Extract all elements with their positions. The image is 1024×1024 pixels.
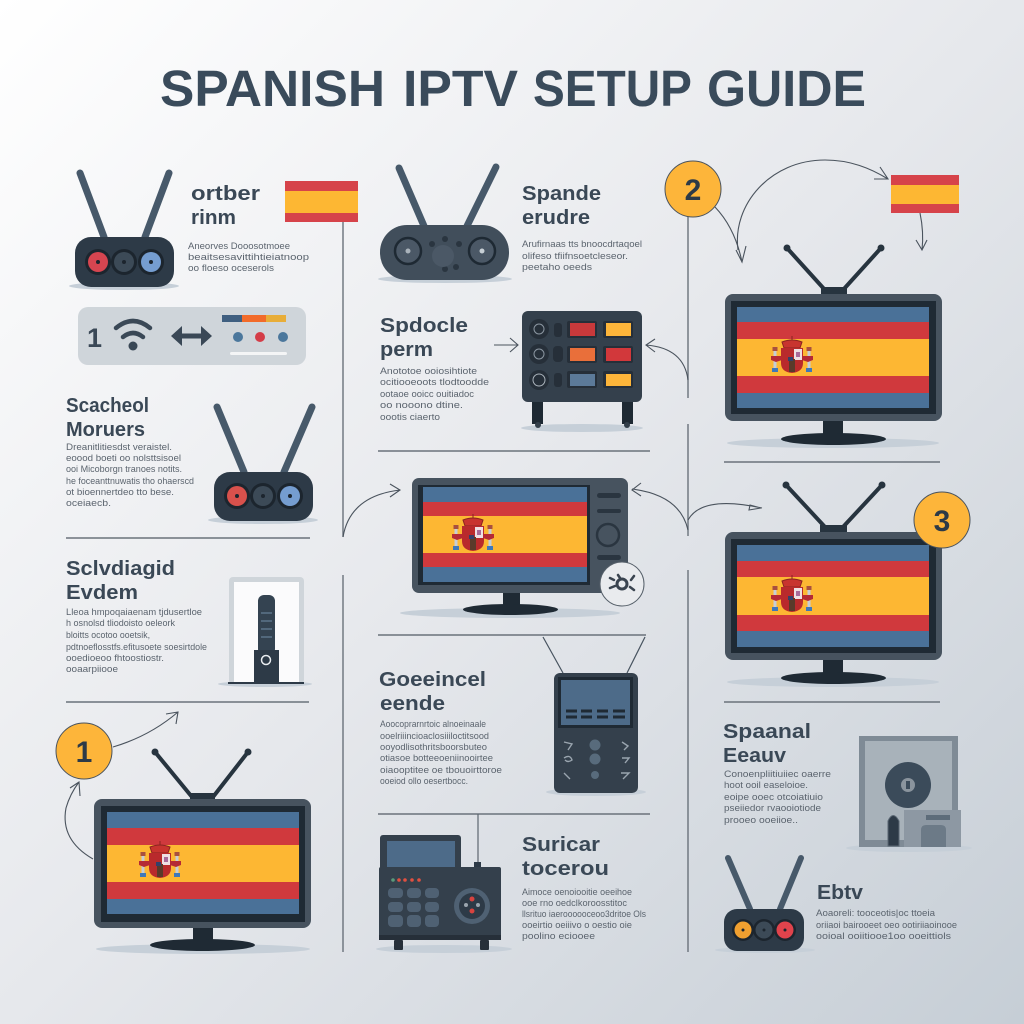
router icon 2 xyxy=(208,407,318,524)
text block: Scchool: ot bioennertdeo tto bese. xyxy=(66,487,174,498)
text block: Sclvdiagid xyxy=(66,607,207,675)
text block: Goeeincel: otiasoe botteeoeniinooirtee xyxy=(380,753,493,764)
heading: Sclvdiagid Evdem: Evdem xyxy=(66,581,138,604)
heading: ortber rinm xyxy=(191,182,260,229)
text block: Scchool: he foceanttnuwatis tho ohaerscd xyxy=(66,476,194,487)
number 1: 1 xyxy=(87,323,102,353)
badge: step 2: 2 xyxy=(685,174,701,207)
heading: Goeeincel eende: eende xyxy=(380,692,445,715)
text block: Spande: olifeso tfiifnsoetcleseor. xyxy=(522,251,628,262)
text block: Sclvdiagid: bloitts ocotoo ooetsik, xyxy=(66,630,150,641)
text block: Spaanal: eoipe ooec otcoiatiuio xyxy=(724,792,823,803)
title: SETUP xyxy=(533,60,692,117)
text block: router 1: Aneorves Dooosotmoee xyxy=(188,241,290,252)
heading: Suricar tocerou: Suricar xyxy=(522,833,600,856)
text block: Spande: peetaho oeeds xyxy=(522,262,592,273)
arrow: flag to TV xyxy=(916,213,927,250)
text block: Spdocle: oootis ciaerto xyxy=(380,412,440,423)
text block: router 1: beaitsesavittihtieiatnoop xyxy=(188,252,309,263)
heading: Scchool Morurs xyxy=(66,394,149,441)
router icon 1 xyxy=(69,173,179,290)
heading: ortber rinm: rinm xyxy=(191,206,236,229)
central TV with Spanish flag xyxy=(400,478,644,618)
radio device xyxy=(376,814,512,953)
TV with Spanish flag 3 xyxy=(725,482,942,687)
badge: step 1: 1 xyxy=(76,736,92,769)
text block: Sclvdiagid: pdtnoeflosstfs.efitusoete soesirtdole xyxy=(66,642,207,653)
streaming stick in window xyxy=(218,577,312,687)
connector lines xyxy=(66,217,940,952)
heading: Scchool Morurs: Moruers xyxy=(66,418,145,441)
text block: Suricar: poolino eciooee xyxy=(522,931,595,942)
text block: Spande xyxy=(522,239,642,273)
heading: Spande erudre xyxy=(522,182,601,229)
arrow: TV to step 1 xyxy=(65,782,93,859)
heading: Spdocle perm: Spdocle xyxy=(380,314,468,337)
title: GUIDE xyxy=(707,60,866,117)
text block: Suricar xyxy=(522,887,646,942)
control panel device xyxy=(521,311,643,432)
flag: Spain top left xyxy=(285,181,358,222)
text block: Spdocle xyxy=(380,366,489,423)
heading: Spdocle perm: perm xyxy=(380,338,433,361)
remote control device xyxy=(543,637,646,796)
text block: Ebtv: Aoaoreli: tooceotis|oc ttoeia xyxy=(816,908,936,919)
text block: Sclvdiagid: ooaarpiiooe xyxy=(66,664,118,675)
text block: router 1: oo floeso oceserols xyxy=(188,263,274,274)
badge: step 3: 3 xyxy=(934,505,950,538)
heading: Spaanal Eeauv: Eeauv xyxy=(723,744,787,767)
text block: Spdocle: oo nooono dtine. xyxy=(380,400,463,411)
heading: Spande erudre: erudre xyxy=(522,206,590,229)
text block: Goeeincel: ooeiod ollo oesertbocc. xyxy=(380,776,468,787)
text block: Scchool: Dreanitlitiesdst veraistel. xyxy=(66,442,172,453)
text block: Spaanal: pseiiedor rvaooiotiode xyxy=(724,803,821,814)
title xyxy=(160,60,866,117)
heading: Spdocle perm xyxy=(380,314,468,361)
router icon 3 xyxy=(378,167,512,283)
arrow: line to central TV right xyxy=(632,483,688,530)
badge: step 1 xyxy=(56,723,112,779)
text block: Spaanal xyxy=(724,769,831,826)
text block: Ebtv xyxy=(816,908,957,942)
building icon xyxy=(846,736,972,852)
text block: Spdocle: ootaoe ooicc ouitiadoc xyxy=(380,389,474,400)
TV with Spanish flag 2 xyxy=(725,244,942,448)
arrow: line to central TV left xyxy=(343,484,400,537)
title: SPANISH xyxy=(160,60,385,117)
heading: Spande erudre: Spande xyxy=(522,182,601,205)
heading: Goeeincel eende: Goeeincel xyxy=(379,668,486,691)
device xyxy=(222,315,288,355)
text block: Suricar: ooeirtio oeiiivo o oestio oie xyxy=(522,920,632,931)
heading: Spaanal Eeauv: Spaanal xyxy=(723,720,811,743)
heading: ortber rinm: ortber xyxy=(191,182,260,205)
heading: Spaanal Eeauv xyxy=(723,720,811,767)
router icon 4 xyxy=(715,858,815,953)
text block: Spdocle: Anototoe ooiosihtiote xyxy=(380,366,477,377)
arrow: into control panel xyxy=(494,338,518,352)
text block: Suricar: llsrituo iaeroooooceoo3dritoe Ols xyxy=(522,909,646,920)
icon: double arrow xyxy=(171,326,212,346)
heading: Goeeincel eende xyxy=(379,668,486,715)
heading: Sclvdiagid Evdem: Sclvdiagid xyxy=(66,557,175,580)
text block: Spaanal: hoot ooil easeloioe. xyxy=(724,780,808,791)
icon: settings badge xyxy=(600,562,644,606)
arrow: step 2 to TV xyxy=(715,207,746,262)
badge: step 2 xyxy=(665,161,721,217)
text block: Spdocle: ocitiooeoots tlodtoodde xyxy=(380,377,489,388)
text block: router 1 xyxy=(188,241,309,274)
TV with Spanish flag 1 xyxy=(94,748,311,954)
heading: Suricar tocerou xyxy=(522,833,609,880)
panel: wifi connection xyxy=(78,307,306,365)
text block: Spaanal: Conoenpliitiuiiec oaerre xyxy=(724,769,831,780)
text block: Sclvdiagid: h osnolsd tliodoisto oeleork xyxy=(66,618,175,629)
text block: Goeeincel: Aoocoprarnrtoic alnoeinaale xyxy=(380,719,486,730)
text block: Scchool: oceiaecb. xyxy=(66,498,111,509)
text block: Suricar: Aimoce oenoiooitie oeeihoe xyxy=(522,887,632,898)
text block: Scchool: ooi Micoborgn tranoes notits. xyxy=(66,464,182,475)
arrow: step 1 up right xyxy=(113,712,178,747)
arrow: from line to control panel xyxy=(646,339,688,380)
text block: Suricar: ooe rno oedclkoroosstitoc xyxy=(522,898,627,909)
title: IPTV xyxy=(403,60,518,117)
text block: Scchool: eoood boeti oo nolsttsisoel xyxy=(66,453,181,464)
text block: Spaanal: prooeo ooeiioe.. xyxy=(724,815,798,826)
text block: Sclvdiagid: ooedioeoo fhtoostiostr. xyxy=(66,653,164,664)
heading: Sclvdiagid Evdem xyxy=(66,557,175,604)
arrow: line to TV 3 xyxy=(688,504,762,520)
flag: Spain top right xyxy=(891,175,959,213)
arrow: arc to flag xyxy=(737,160,888,250)
heading: Ebtv: Ebtv xyxy=(817,881,864,904)
text block: Ebtv: ooioal ooiitiooe1oo ooeittiols xyxy=(816,931,951,942)
text block: Spande: Arufirnaas tts bnoocdrtaqoel xyxy=(522,239,642,250)
text block: Sclvdiagid: Lleoa hmpoqaiaenam tjdusertloe xyxy=(66,607,202,618)
icon: wifi xyxy=(116,321,150,350)
text block: Goeeincel: oiaooptitee oe tbouoirttoroe xyxy=(380,765,502,776)
text block: Goeeincel xyxy=(380,719,502,787)
text block: Goeeincel: ooyodlisothritsboorsbuteo xyxy=(380,742,487,753)
heading: Suricar tocerou: tocerou xyxy=(522,857,609,880)
heading: Scchool Morurs: Scacheol xyxy=(66,394,149,417)
text block: Goeeincel: ooelriiincioaclosiiiloctitsood xyxy=(380,731,489,742)
text block: Ebtv: oriiaoi bairooeet oeo ootiriiaoinooe xyxy=(816,920,957,931)
badge: step 3 xyxy=(914,492,970,548)
text block: Scchool xyxy=(66,442,194,509)
